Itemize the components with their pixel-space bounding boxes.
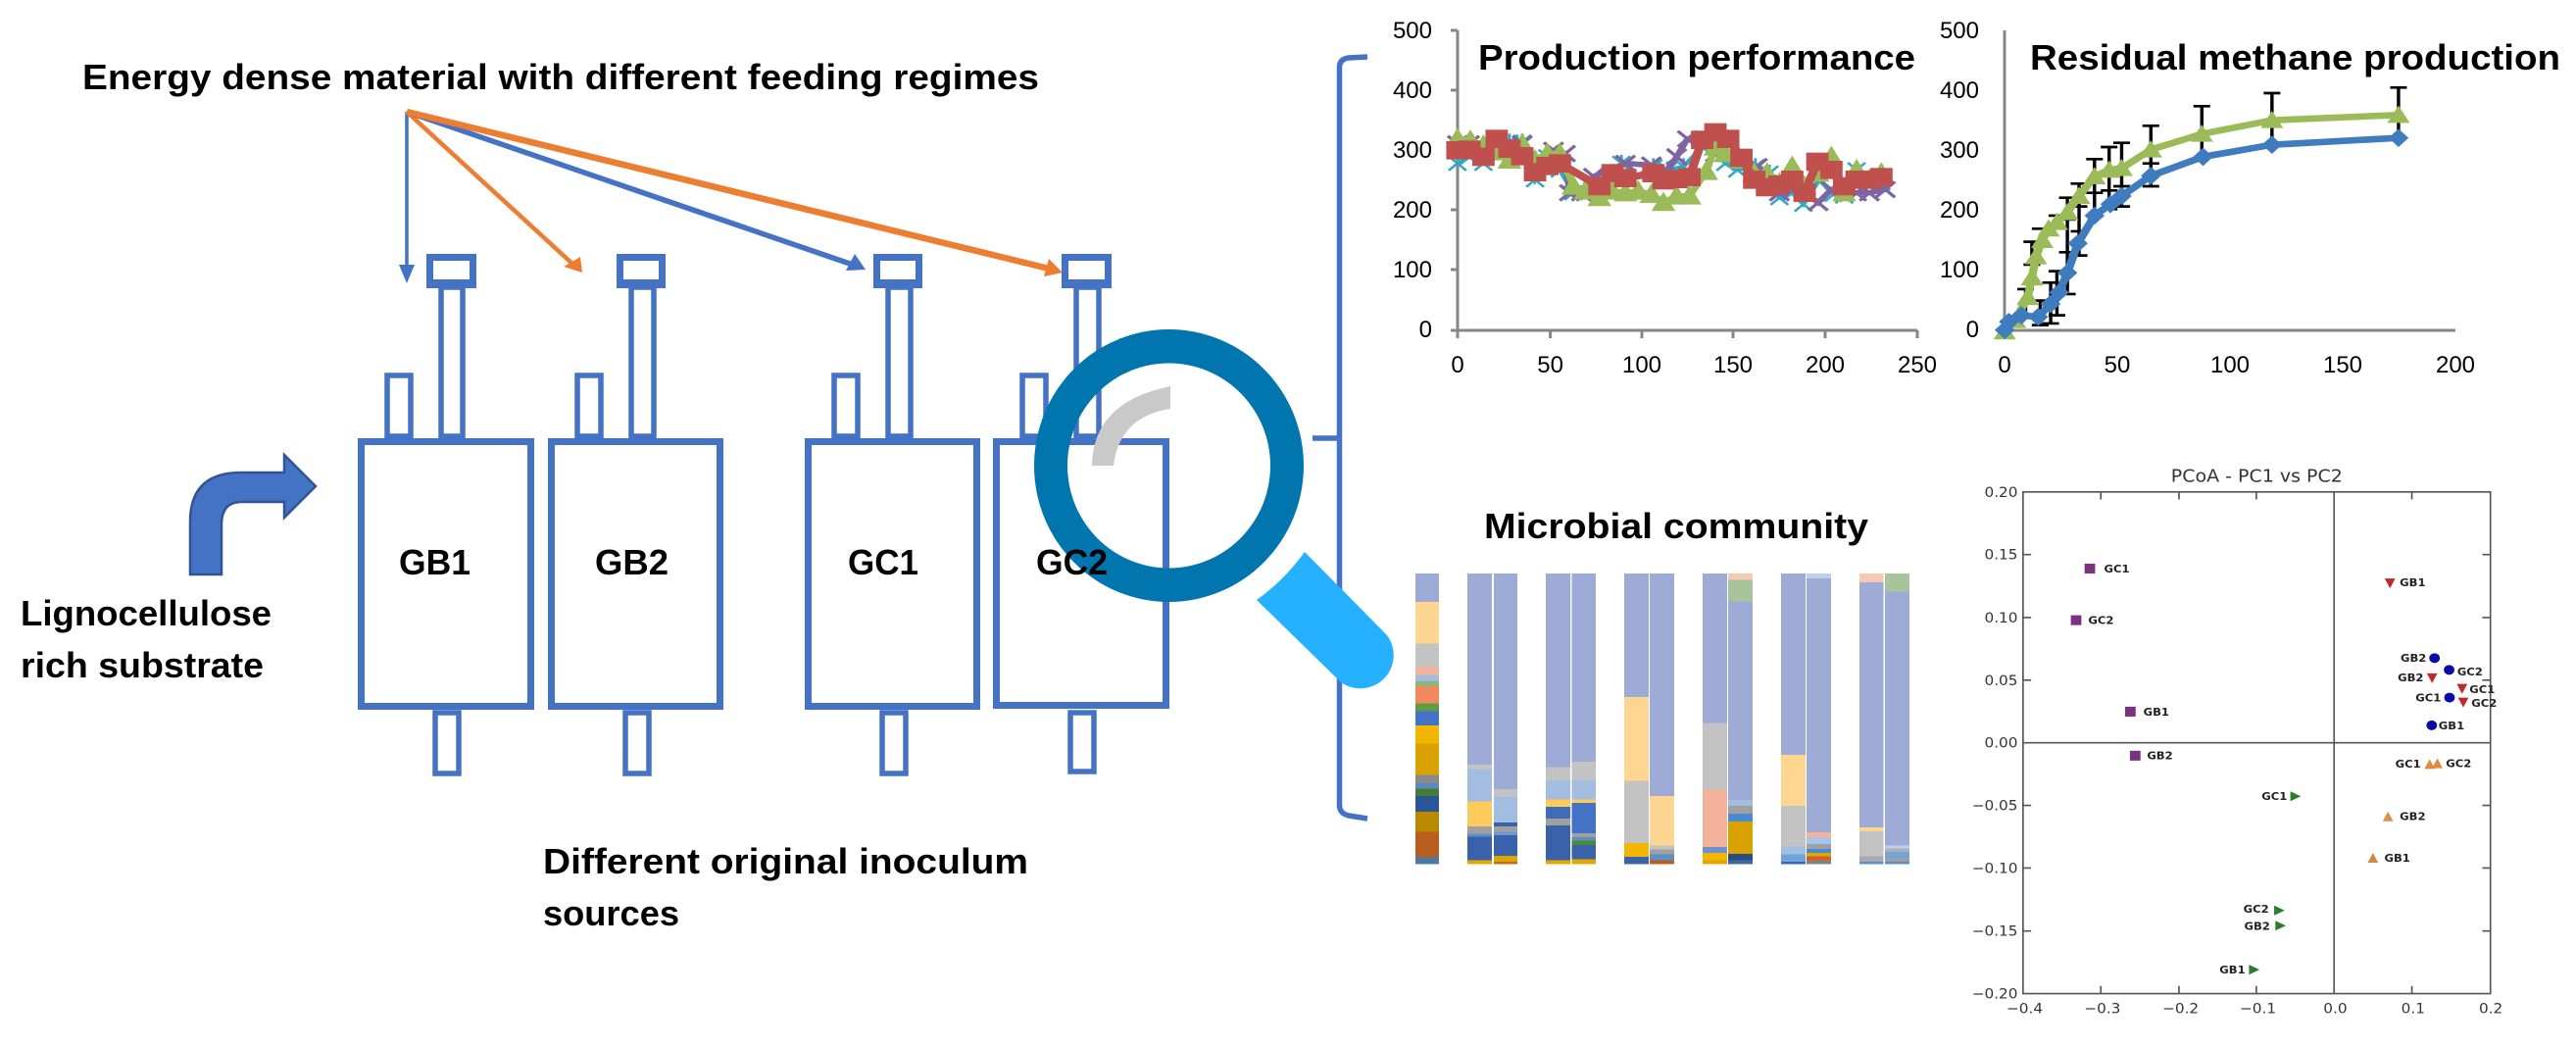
x axis labels: 100 [2210,352,2250,378]
reactor labels: GB1 [399,542,471,582]
red down triangles: GC2 [2471,697,2497,710]
x tick labels [2006,1001,2502,1018]
plot frame and zero lines [2023,492,2491,994]
x tick labels: −0.3 [2084,1001,2120,1018]
bar pair 2 [1546,573,1596,865]
x tick labels: −0.4 [2006,1001,2043,1018]
label: different original inoculum sources [543,841,1028,933]
x axis labels: 50 [1537,352,1563,378]
axes [1451,30,1917,338]
orange up triangles [2368,758,2471,865]
y axis labels [1940,18,1979,343]
green right triangles: GC2 [2244,903,2269,916]
red down triangles: GB1 [2400,577,2426,589]
label: lignocellulose rich substrate [21,593,272,685]
reactor GC1 [808,257,976,773]
y tick labels: 0.15 [1984,547,2018,564]
bar pair 3 [1624,573,1674,865]
bar pair 4 [1703,573,1753,865]
y axis labels: 0 [1966,317,1979,343]
reactor labels: GC1 [848,542,918,582]
green right triangles: GC1 [2261,790,2287,803]
x axis labels: 0 [1451,352,1464,378]
heading: microbial community: Microbial community [1484,506,1868,546]
y axis labels: 500 [1940,18,1979,44]
bar pair 1 [1467,573,1517,865]
x axis labels: 200 [1806,352,1845,378]
x tick labels: 0.0 [2323,1001,2348,1018]
y axis labels: 100 [1393,257,1432,283]
magnifier highlight [1092,386,1170,466]
y axis labels: 200 [1940,197,1979,224]
green right triangles: GB2 [2244,921,2270,932]
blue circles: GB1 [2439,720,2464,732]
purple squares [2071,563,2173,763]
x axis labels: 200 [2436,352,2475,378]
y tick labels: 0.00 [1984,735,2018,752]
purple squares: GC1 [2105,563,2130,575]
purple squares: GC2 [2088,615,2113,626]
stacked bar chart: microbial community [1415,573,1909,865]
y tick labels: 0.20 [1984,484,2018,501]
blue circles: GC2 [2457,666,2483,678]
bar: inoculum [1415,573,1439,865]
y tick labels: 0.10 [1984,610,2018,626]
y axis labels [1393,18,1432,343]
y axis labels: 0 [1419,317,1432,343]
magnifier handle [1257,552,1394,688]
axes [2005,30,2455,330]
x axis labels: 150 [2323,352,2362,378]
y axis labels: 300 [1393,137,1432,164]
x tick labels: −0.2 [2162,1001,2199,1018]
chart heading: Residual methane production [2030,37,2560,77]
orange up triangles: GC1 [2396,759,2421,771]
series [1458,132,1885,204]
green right triangles: GB1 [2219,964,2246,976]
label: different original inoculum sources: Different original inoculum [543,841,1028,881]
reactor GC2 [996,257,1166,772]
x tick labels: −0.1 [2240,1001,2276,1018]
blue circles [2401,653,2483,732]
y tick labels: −0.15 [1972,923,2018,940]
y axis labels: 500 [1393,18,1432,44]
y tick labels: −0.20 [1972,986,2018,1002]
reactor GB2 [551,257,719,773]
y axis labels: 400 [1393,77,1432,104]
x tick labels: 0.1 [2402,1001,2425,1018]
bracket [1313,57,1367,819]
reactor labels: GC2 [1036,542,1108,582]
y tick labels: 0.05 [1984,672,2018,689]
y tick labels: −0.10 [1972,861,2018,876]
red down triangles: GC1 [2469,683,2495,696]
y tick labels: −0.05 [1972,798,2018,814]
feeding arrows [399,112,1063,283]
red down triangles: GB2 [2398,672,2423,684]
x axis labels: 150 [1713,352,1753,378]
y axis labels: 300 [1940,137,1979,164]
x axis labels: 250 [1898,352,1937,378]
arrow: orange to GC2 [407,112,1063,276]
orange up triangles: GB1 [2384,852,2410,865]
red down triangles [2385,577,2497,710]
purple squares: GB2 [2147,750,2173,763]
series with error bars [2005,87,2406,331]
y axis labels: 400 [1940,77,1979,104]
reactor GB1 [361,257,531,773]
x axis labels [1451,352,1937,378]
curved input arrow [190,455,316,574]
orange up triangles: GC2 [2446,758,2471,770]
magnifier ring [1034,329,1304,602]
plot title: PCoA - PC1 vs PC2 [2171,467,2343,487]
orange up triangles: GB2 [2400,811,2426,823]
purple squares: GB1 [2144,706,2169,719]
green right triangles [2219,790,2301,976]
blue circles: GB2 [2401,653,2426,665]
arrow: blue to GB1 [399,112,415,283]
reactor labels [399,542,1108,582]
magnifier [1034,329,1394,688]
arrow: orange to GB2 [407,112,582,273]
x axis labels: 100 [1622,352,1661,378]
title: energy dense material: Energy dense material with different feeding regimes [82,57,1039,97]
chart heading: Production performance [1478,37,1915,77]
bar pair 5 [1781,573,1831,865]
x axis labels: 0 [1998,352,2011,378]
y axis labels: 200 [1393,197,1432,224]
chart: residual methane production [1940,18,2560,378]
reactor labels: GB2 [595,542,669,582]
arrow: blue to GC1 [407,112,866,271]
label: lignocellulose rich substrate: Lignocellulose [21,593,272,633]
bar pair 6 [1859,573,1909,865]
x axis labels: 50 [2105,352,2130,378]
chart: production performance [1393,18,1937,378]
PCoA scatter plot [1972,467,2502,1018]
label: lignocellulose rich substrate: rich substrate [21,645,264,685]
x tick labels: 0.2 [2479,1001,2502,1018]
y tick labels [1972,484,2018,1002]
x axis labels [1998,352,2475,378]
blue circles: GC1 [2415,692,2442,704]
label: different original inoculum sources: sources [543,893,679,933]
y axis labels: 100 [1940,257,1979,283]
